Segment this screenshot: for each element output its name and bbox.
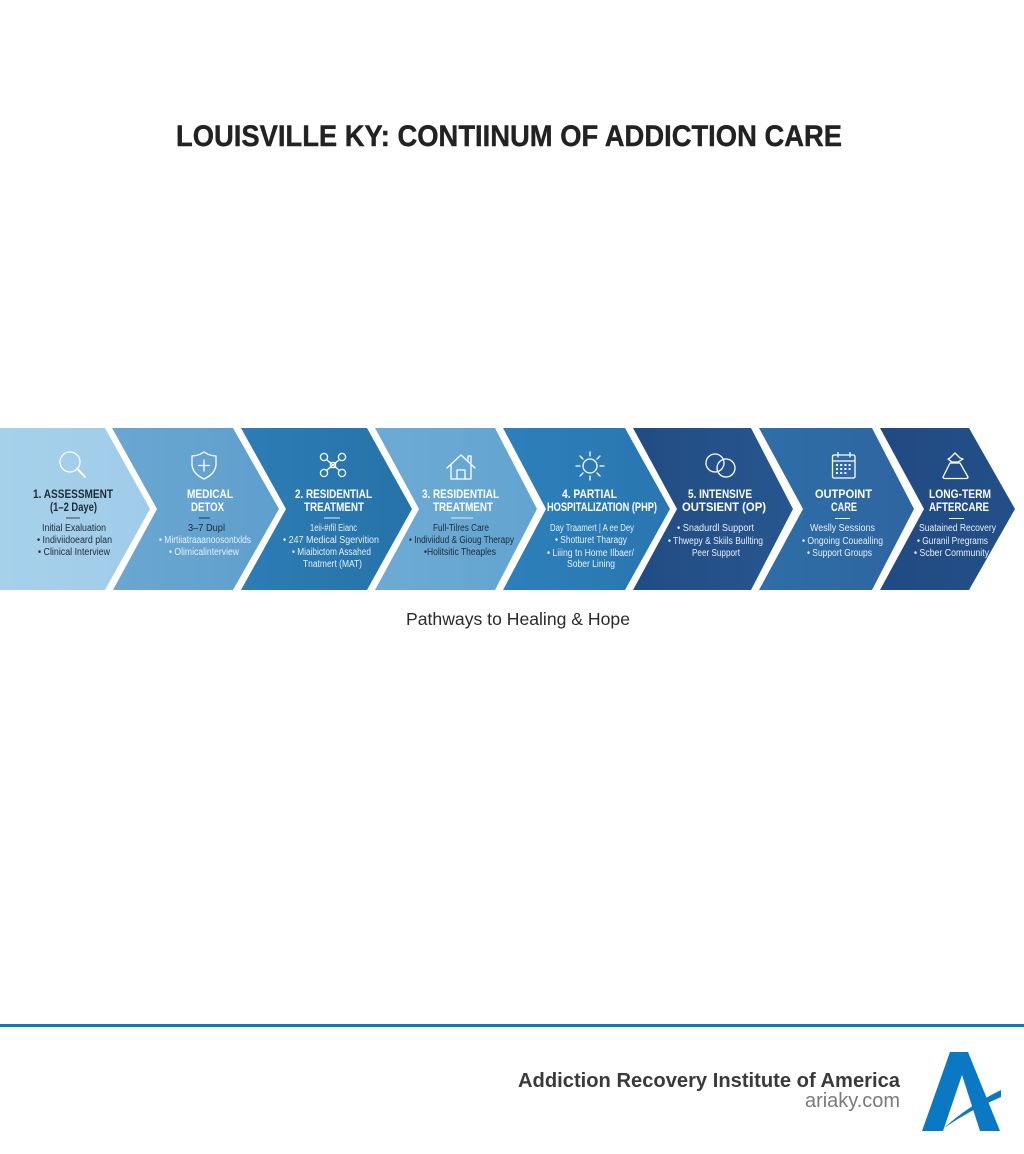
footer organization name: Addiction Recovery Institute of America — [518, 1070, 901, 1092]
panel: step 1 assessment: 1. ASSESSMENT — [33, 489, 113, 501]
title: LOUISVILLE KY: CONTIINUM OF ADDICTION CARE — [176, 120, 842, 153]
panel: step 4 partial hospitalization: Day Traamert | A ee Dey — [550, 523, 634, 534]
panel: step 2 residential treatment: 1eii-#ıfil Eianc — [310, 523, 357, 534]
panel: step 3 residential treatment: • Indiviidud & Gioug Therapy — [409, 535, 514, 546]
panel: step 5 intensive outpatient: • Snadurdl Support — [677, 523, 754, 534]
panel: step 4 partial hospitalization: 4. PARTIAL — [562, 489, 617, 501]
icon: interlocked rings — [706, 454, 735, 477]
panel: step 1 assessment: • Indiviidoeard plan — [37, 535, 112, 546]
panel: step 4 partial hospitalization: Sober Lining — [567, 559, 615, 570]
panel: outpoint care: Weslly Sessions — [810, 523, 875, 534]
panel: outpoint care — [759, 428, 914, 590]
icon: organization logo — [922, 1052, 1001, 1131]
icon: connected nodes — [320, 453, 346, 477]
panel: long-term aftercare: • Scber Community — [914, 548, 989, 559]
panel: medical detox — [112, 428, 279, 590]
panel: medical detox: DETOX — [191, 502, 224, 514]
panel: long-term aftercare — [880, 428, 1015, 590]
panel: outpoint care: • Support Groups — [807, 548, 872, 559]
panel: step 3 residential treatment — [375, 428, 537, 590]
panel: step 1 assessment: Initial Exaluation — [42, 523, 106, 534]
panel: medical detox: MEDICAL — [187, 489, 233, 501]
panel: long-term aftercare: AFTERCARE — [929, 502, 989, 514]
panel: step 4 partial hospitalization: HOSPITALIZATION (PHP) — [547, 502, 657, 514]
panel: long-term aftercare: Suatained Recovery — [919, 523, 996, 534]
panel: step 2 residential treatment: 2. RESIDENTIAL — [295, 489, 372, 501]
panel: step 5 intensive outpatient: Peer Support — [692, 548, 740, 559]
panel: step 1 assessment: • Clinical Interview — [38, 547, 111, 558]
panel: step 3 residential treatment: TREATMENT — [433, 502, 493, 514]
panel: outpoint care: CARE — [831, 502, 857, 514]
panel: medical detox: • Mirtiiatraaanoosontxlds — [159, 535, 251, 546]
panel: step 2 residential treatment: TREATMENT — [304, 502, 364, 514]
icon: flask — [943, 453, 968, 478]
footer website: ariaky.com — [805, 1090, 900, 1112]
icon: calendar — [832, 452, 855, 478]
panel: step 4 partial hospitalization: • Shotturet Tharagy — [555, 535, 627, 546]
icon: sun — [576, 452, 604, 480]
panel: step 3 residential treatment: •Holitsitic Theaples — [424, 547, 496, 558]
panel: medical detox: • Olimicalinterview — [169, 547, 240, 558]
panel: step 5 intensive outpatient: • Thwepy & Skiils Bullting — [668, 536, 763, 547]
icon: house — [447, 455, 475, 479]
panel: outpoint care: OUTPOINT — [815, 489, 872, 501]
panel: step 2 residential treatment — [241, 428, 412, 590]
panel: step 2 residential treatment: Tnatmert (MAT) — [303, 559, 362, 570]
panel: outpoint care: • Ongoing Couealling — [802, 536, 883, 547]
panel: step 2 residential treatment: • Miaibictom Assahed — [292, 547, 371, 558]
footer rule — [0, 1024, 1024, 1027]
panel: step 4 partial hospitalization — [503, 428, 670, 590]
panel: step 5 intensive outpatient — [633, 428, 793, 590]
panel: long-term aftercare: • Guranil Pregrams — [917, 536, 988, 547]
panel: step 3 residential treatment: Full-Tilres Care — [433, 523, 489, 534]
caption: Pathways to Healing & Hope — [406, 609, 630, 629]
panel: step 4 partial hospitalization: • Liiing tn Home Ilbaer/ — [547, 548, 634, 559]
panel: long-term aftercare: LONG-TERM — [929, 489, 991, 501]
icon: shield with cross — [192, 452, 216, 479]
panel: step 5 intensive outpatient: 5. INTENSIVE — [688, 489, 752, 501]
panel: step 1 assessment — [0, 428, 150, 590]
chevron flow diagram — [0, 428, 1015, 590]
icon: magnifying glass — [60, 452, 85, 477]
panel: step 3 residential treatment: 3. RESIDENTIAL — [422, 489, 499, 501]
panel: step 5 intensive outpatient: OUTSIENT (OP) — [682, 502, 766, 514]
panel: step 1 assessment: (1–2 Daye) — [50, 502, 97, 514]
panel: medical detox: 3–7 Dupl — [188, 523, 225, 534]
panel: step 2 residential treatment: • 247 Medical Sgervition — [283, 535, 379, 546]
